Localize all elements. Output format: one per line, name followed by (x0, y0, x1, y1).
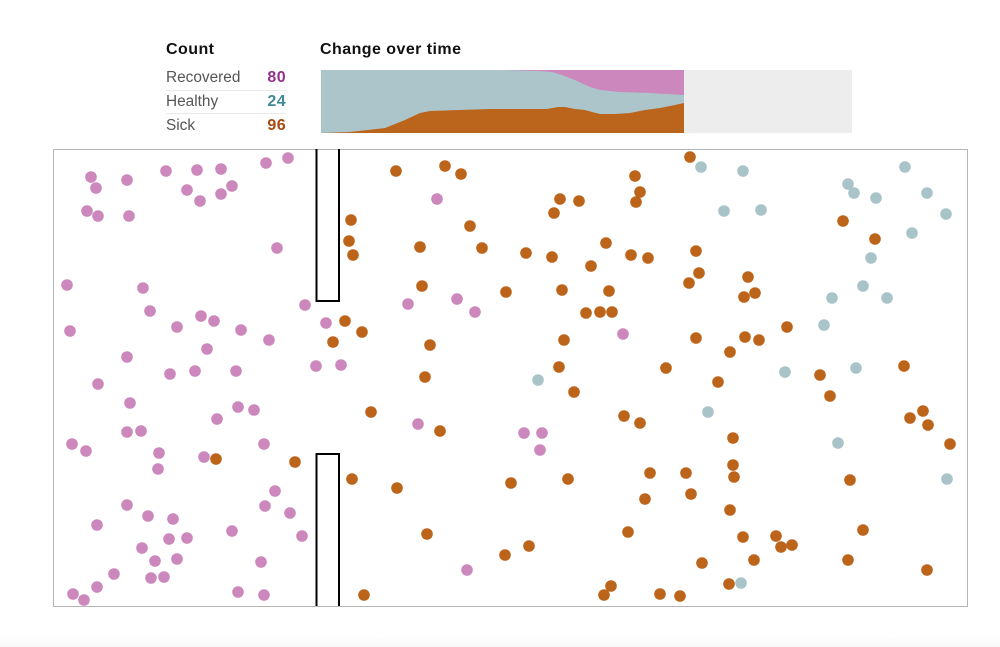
healthy dots (532, 161, 953, 589)
row: sick: Sick (166, 117, 195, 134)
row: healthy: Healthy (166, 93, 218, 110)
wall: bottom (316, 454, 339, 606)
row: recovered: Recovered (166, 69, 240, 86)
row: healthy: 24 (267, 93, 286, 110)
heading: count: Count (166, 41, 214, 58)
sick dots (210, 151, 956, 602)
row: sick: 96 (267, 117, 286, 134)
recovered dots (61, 152, 629, 606)
row: sick (166, 117, 286, 134)
row: healthy (166, 90, 286, 114)
row: recovered (166, 66, 286, 91)
row: recovered: 80 (267, 69, 286, 86)
wall: top (316, 149, 339, 301)
count table (166, 69, 286, 134)
heading: change over time: Change over time (320, 41, 461, 58)
